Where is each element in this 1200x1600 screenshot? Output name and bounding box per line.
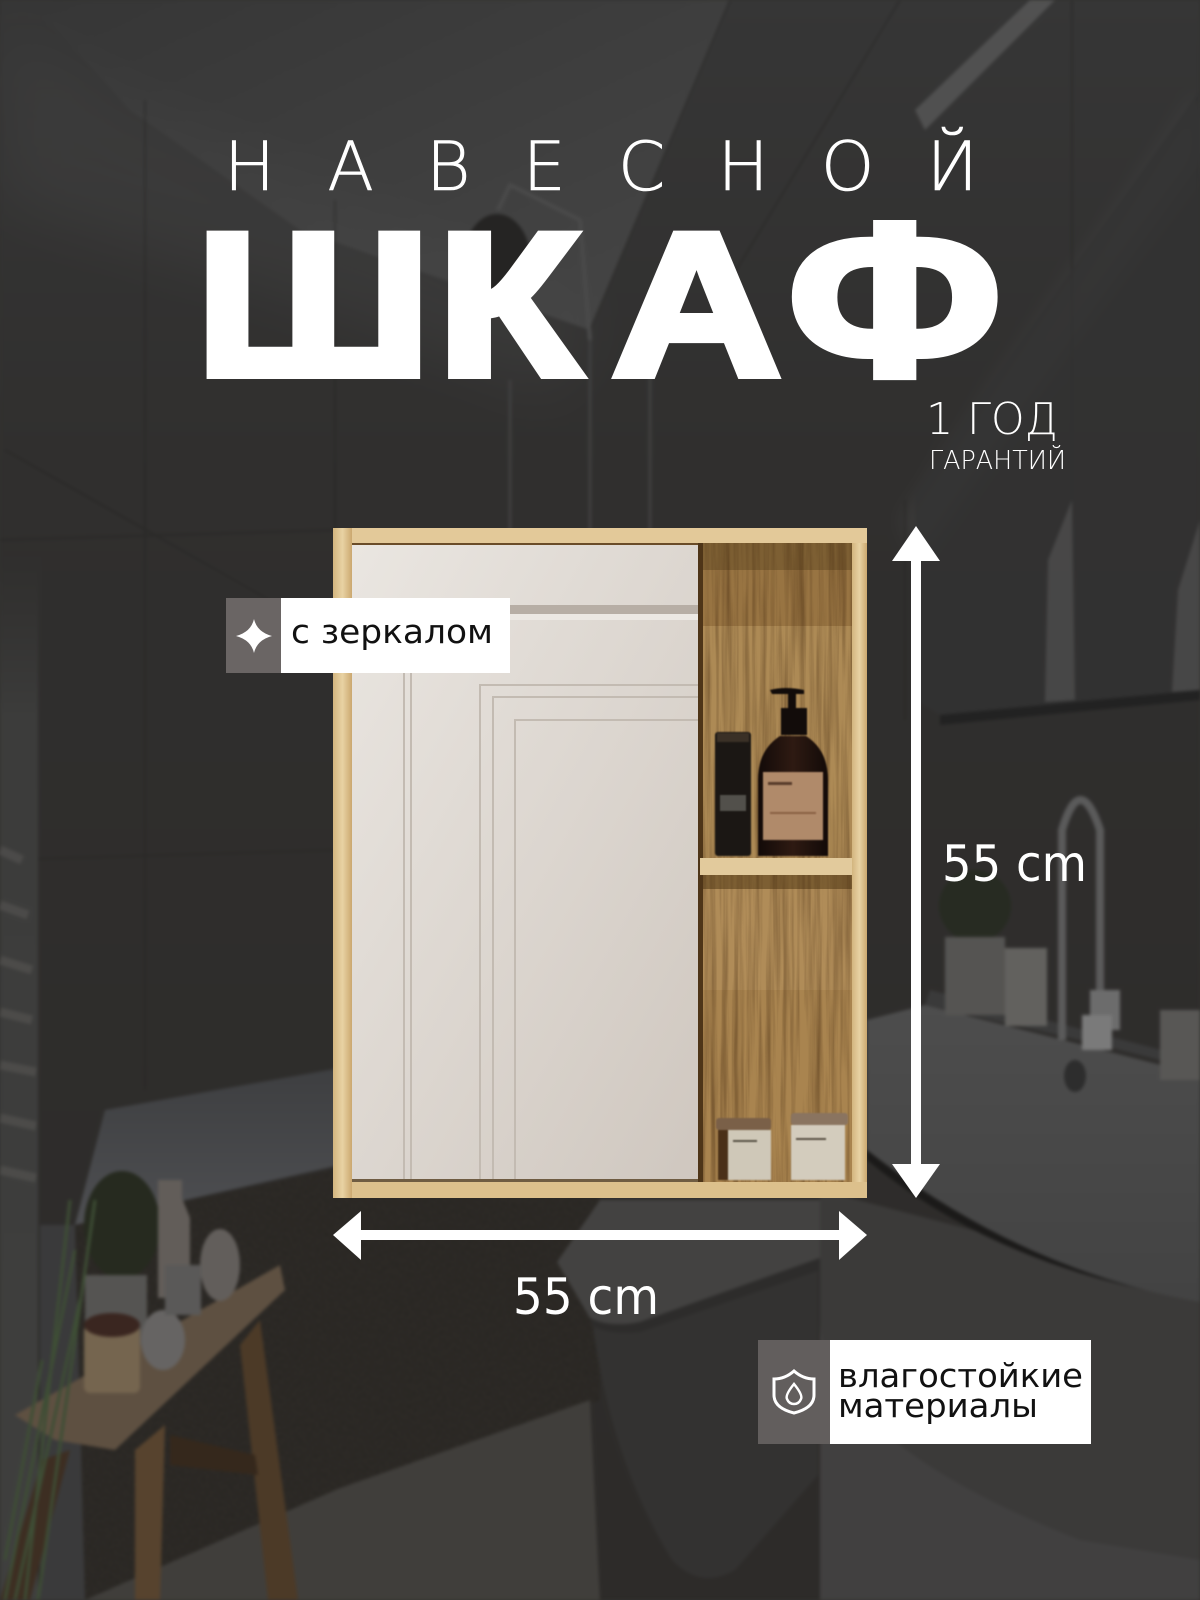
door bbox=[352, 545, 698, 1182]
curtain bbox=[0, 560, 38, 1600]
cabinet frame bbox=[333, 528, 867, 1198]
title line: шкаф: Ш bbox=[195, 190, 431, 419]
top rail bbox=[333, 528, 867, 543]
bottom rail bbox=[333, 1182, 867, 1198]
icon: sparkle bbox=[236, 619, 272, 653]
width label: 55 cm bbox=[513, 1268, 659, 1326]
stool with decor bbox=[0, 1171, 298, 1600]
left upright bbox=[333, 528, 352, 1198]
badge: влагостойкие материалы bbox=[758, 1340, 1091, 1444]
plant and candle on sink bbox=[939, 870, 1200, 1080]
right upright bbox=[852, 528, 867, 1198]
wood back panel bbox=[698, 543, 852, 1182]
bathtub bbox=[75, 1068, 340, 1225]
shower head bbox=[463, 185, 650, 530]
faucet bbox=[1062, 800, 1120, 1092]
jars bbox=[716, 1113, 848, 1180]
vanity bbox=[820, 990, 1200, 1600]
mirror bbox=[915, 90, 1200, 725]
title line: навесной: НАВЕСНОЙ bbox=[224, 127, 978, 207]
small bottle bbox=[715, 732, 751, 856]
width arrow bbox=[333, 1211, 867, 1260]
warranty text bbox=[926, 394, 1066, 476]
badge: влагостойкие материалы: влагостойкие bbox=[838, 1356, 1083, 1395]
cabinet bbox=[333, 528, 867, 1198]
title line: шкаф: Ф bbox=[788, 177, 1002, 421]
height label: 55 cm bbox=[942, 835, 1087, 893]
badge: с зеркалом bbox=[226, 598, 510, 673]
badge: с зеркалом: с зеркалом bbox=[291, 612, 493, 651]
toilet bbox=[557, 1200, 820, 1578]
icon: shield with water drop bbox=[774, 1371, 814, 1413]
ceiling bbox=[30, 0, 730, 330]
title line: шкаф: А bbox=[612, 190, 781, 419]
warranty text: 1 ГОД bbox=[926, 394, 1058, 445]
warranty text: ГАРАНТИЙ bbox=[929, 444, 1066, 476]
height arrow bbox=[892, 526, 940, 1198]
shelf bbox=[700, 858, 852, 875]
badge: влагостойкие материалы: материалы bbox=[838, 1386, 1038, 1425]
title line: шкаф: К bbox=[437, 190, 581, 419]
ceiling light bbox=[915, 0, 1055, 130]
pump bottle bbox=[758, 688, 828, 856]
